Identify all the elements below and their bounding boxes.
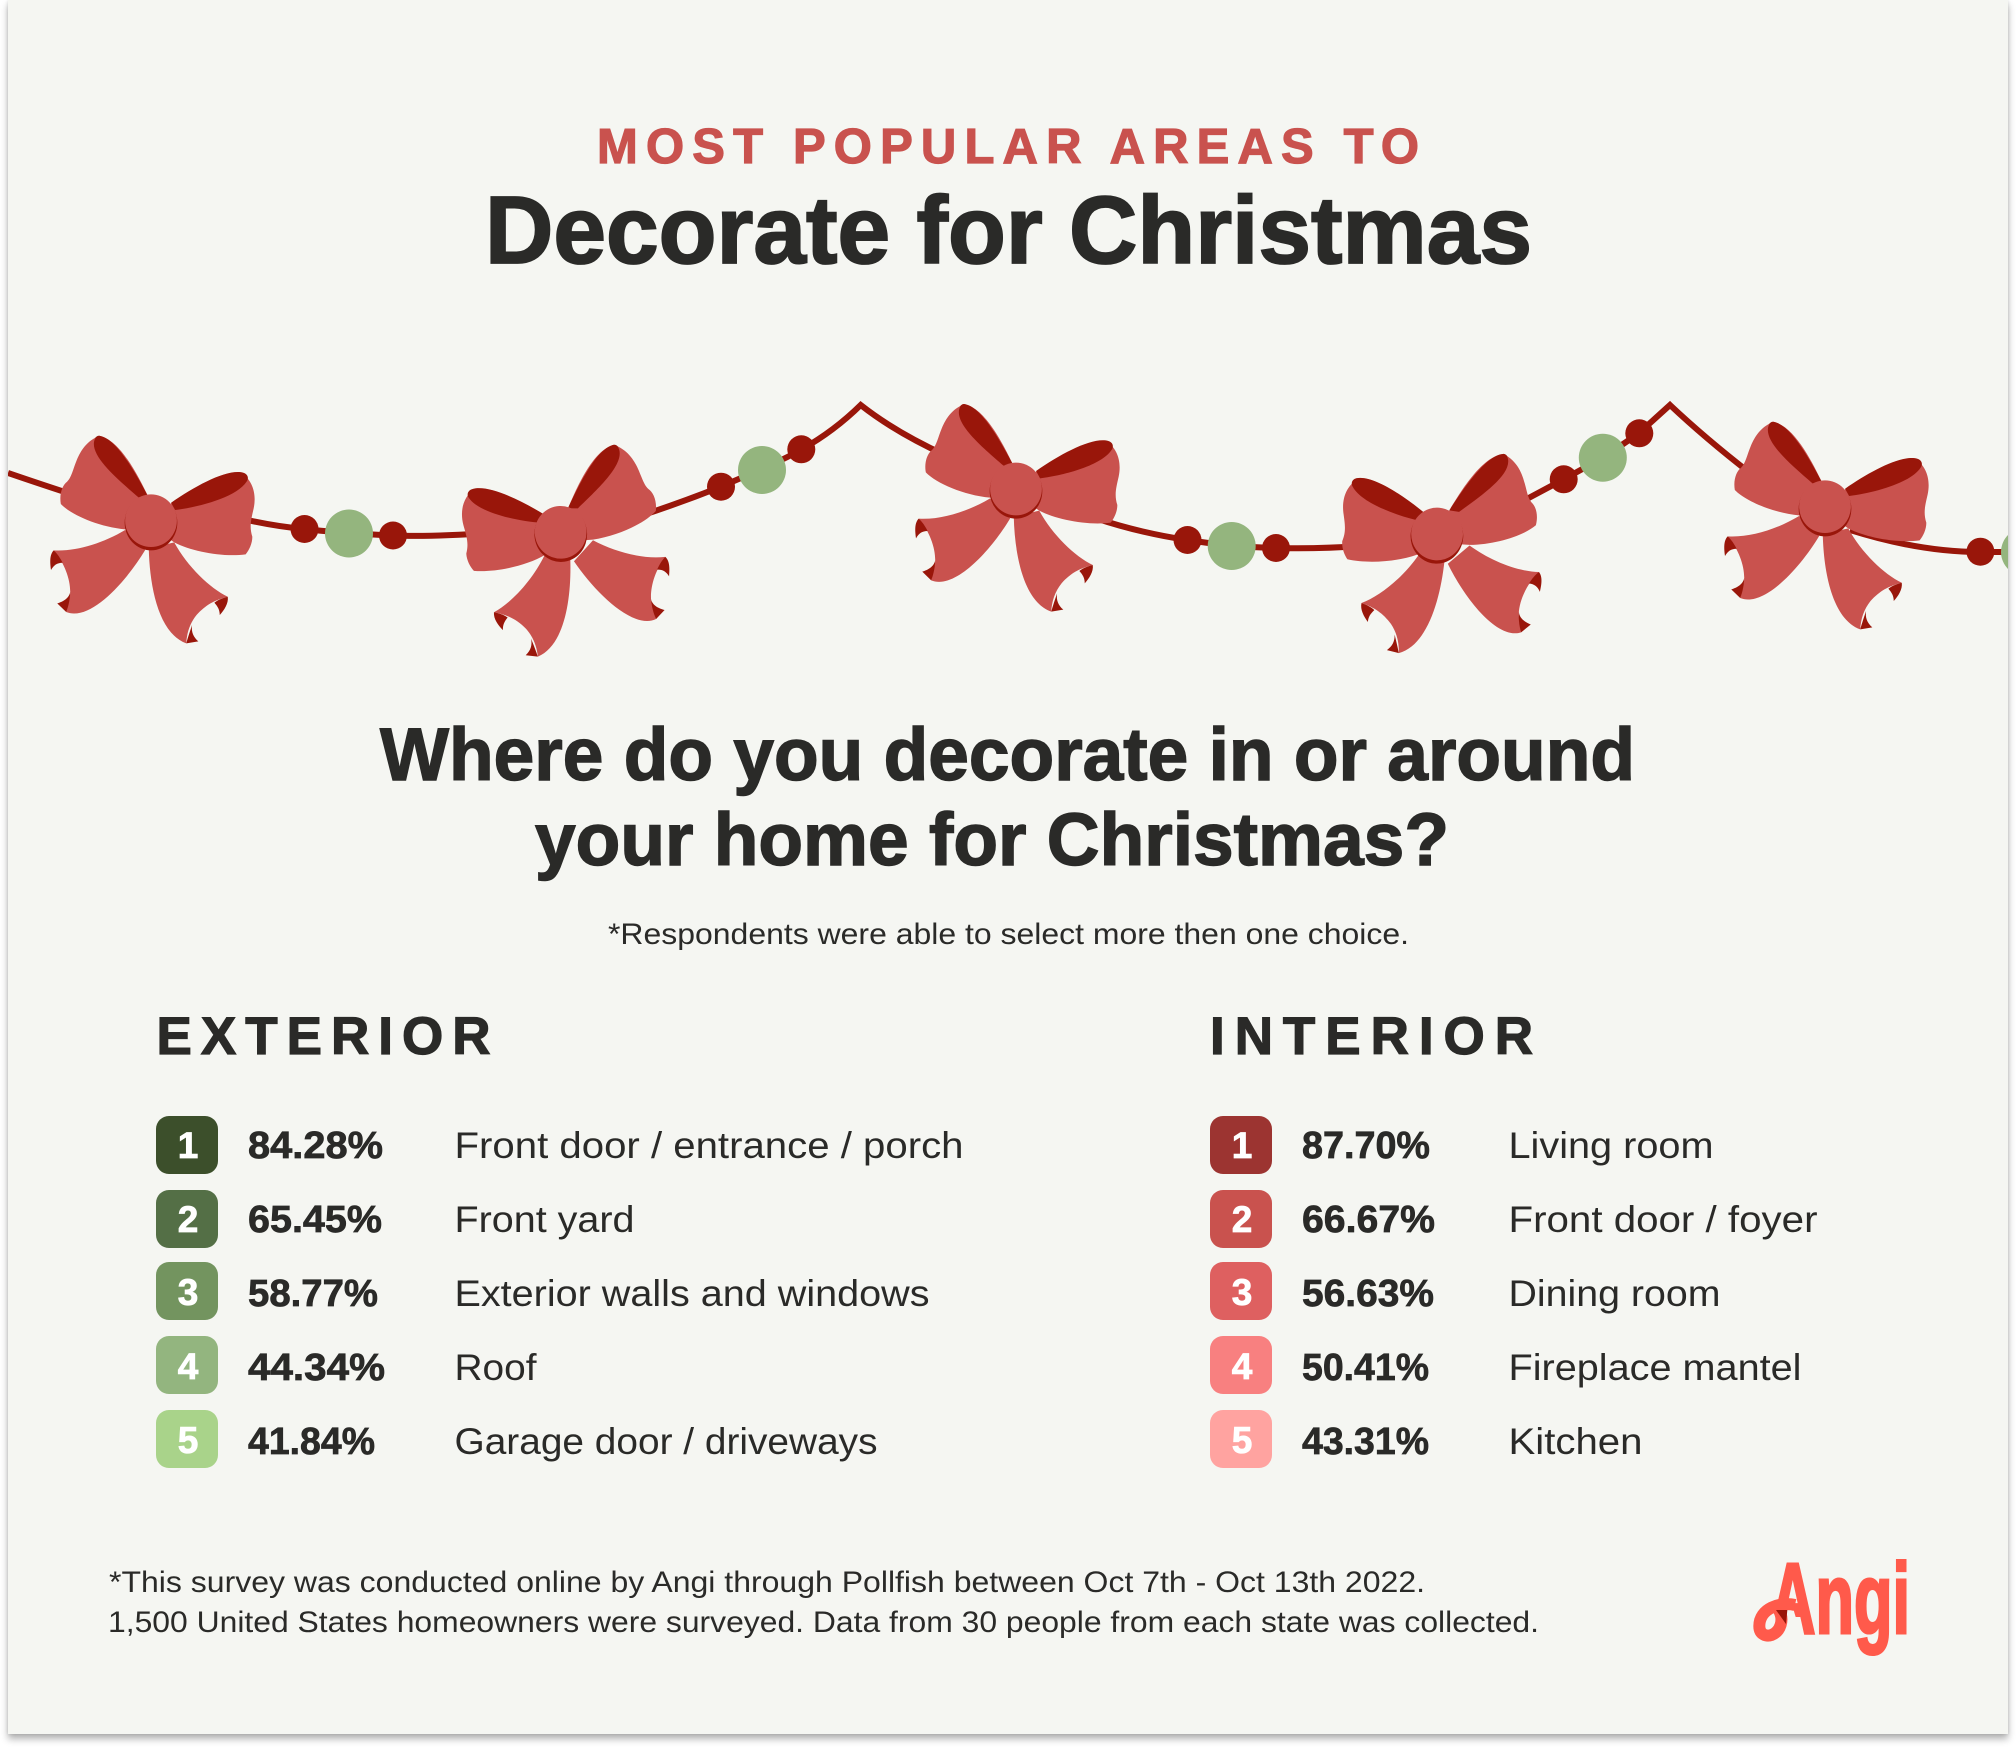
bow 1 [50, 436, 255, 643]
row 2: 2 [178, 1199, 198, 1240]
row 4 [156, 1336, 537, 1394]
question heading [380, 713, 1635, 881]
bow 3 [915, 404, 1120, 612]
row 2 [1210, 1190, 1818, 1248]
question heading: your home for Christmas? [535, 798, 1449, 881]
row 5: 5 [178, 1420, 198, 1461]
row 5 [1210, 1410, 1642, 1468]
row 5: 43.31% [1302, 1421, 1429, 1463]
interior heading: INTERIOR [1210, 1007, 1533, 1066]
row 1: 84.28% [248, 1125, 383, 1167]
row 3: 3 [1232, 1272, 1252, 1313]
respondents note: *Respondents were able to select more then one choice. [608, 918, 1409, 951]
beads [290, 419, 2016, 576]
row 2 [156, 1190, 634, 1248]
row 2: 65.45% [248, 1199, 382, 1241]
row 3 [156, 1262, 930, 1320]
survey footnote: *This survey was conducted online by Angi through Pollfish between Oct 7th - Oct 13th 2022. [109, 1566, 1425, 1599]
row 3: 56.63% [1302, 1273, 1434, 1315]
row 4: 4 [178, 1346, 199, 1387]
eyebrow heading: MOST POPULAR AREAS TO [597, 120, 1419, 174]
row 4: 50.41% [1302, 1347, 1429, 1389]
bow 4 [1342, 454, 1542, 654]
panel: exterior [156, 1007, 964, 1468]
survey footnote [108, 1566, 1539, 1639]
logo: Angi: Angi [1770, 1543, 1910, 1655]
row 3: 3 [178, 1272, 198, 1313]
row 3: 58.77% [248, 1273, 378, 1315]
survey footnote: 1,500 United States homeowners were surveyed. Data from 30 people from each state was collected. [108, 1606, 1539, 1639]
row 4: 4 [1232, 1346, 1253, 1387]
row 2: Front yard [454, 1199, 634, 1240]
bow 2 [459, 442, 674, 660]
row 1: 87.70% [1302, 1125, 1430, 1167]
row 4: Roof [454, 1347, 537, 1388]
logo: Angi [1759, 1543, 1910, 1655]
title: Decorate for Christmas [485, 177, 1532, 284]
row 4: Fireplace mantel [1508, 1347, 1802, 1388]
row 5: 41.84% [248, 1421, 375, 1463]
row 2: 66.67% [1302, 1199, 1435, 1241]
exterior heading: EXTERIOR [156, 1007, 490, 1066]
row 1: Living room [1508, 1125, 1714, 1166]
panel: interior [1210, 1007, 1818, 1468]
row 3: Exterior walls and windows [454, 1273, 930, 1314]
row 2: 2 [1232, 1199, 1252, 1240]
row 5: 5 [1232, 1420, 1252, 1461]
row 1 [156, 1116, 964, 1174]
question heading: Where do you decorate in or around [380, 713, 1635, 796]
row 4 [1210, 1336, 1802, 1394]
row 1: 1 [1232, 1125, 1252, 1166]
row 5 [156, 1410, 878, 1468]
bow 5 [1724, 422, 1929, 629]
row 1: Front door / entrance / porch [454, 1125, 964, 1166]
garland illustration [8, 404, 2016, 665]
row 3 [1210, 1262, 1720, 1320]
garland string [8, 405, 2016, 552]
row 1 [1210, 1116, 1714, 1174]
row 3: Dining room [1508, 1273, 1720, 1314]
row 2: Front door / foyer [1508, 1199, 1818, 1240]
row 5: Garage door / driveways [454, 1421, 878, 1462]
row 1: 1 [178, 1125, 198, 1166]
row 5: Kitchen [1508, 1421, 1642, 1462]
row 4: 44.34% [248, 1347, 385, 1389]
